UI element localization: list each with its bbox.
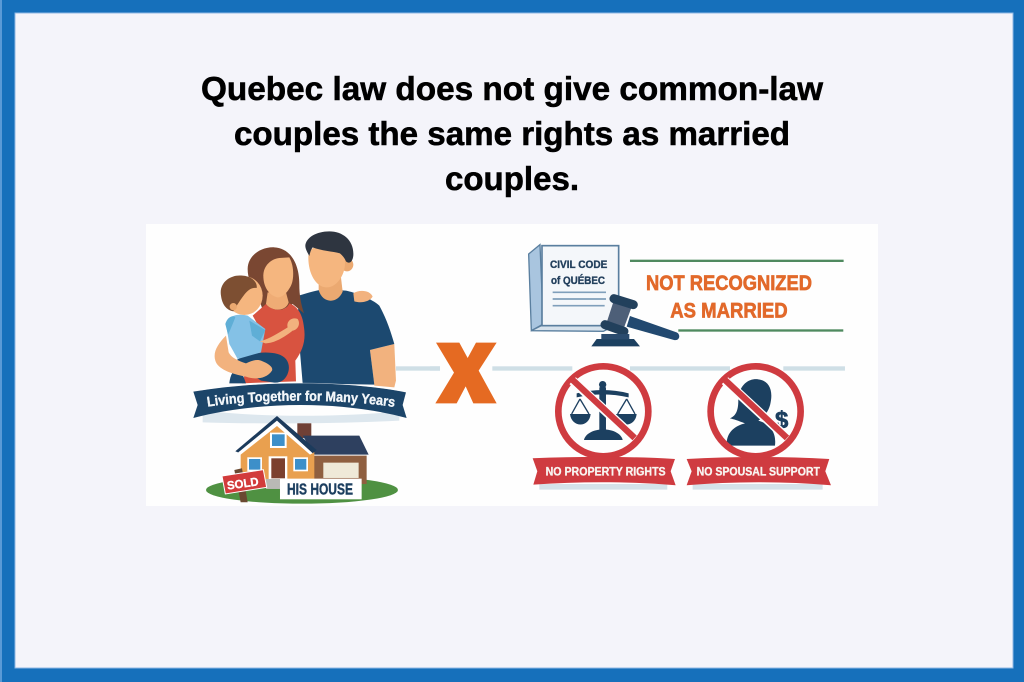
illustration panel: [146, 224, 878, 506]
woman's arm: [215, 336, 272, 378]
connector line left: [396, 366, 440, 371]
title: [201, 70, 823, 197]
chimney: [297, 423, 311, 438]
woman: [229, 247, 305, 383]
his house label: HIS HOUSE: [287, 481, 353, 498]
not recognized heading: [646, 272, 812, 323]
right illustration: [430, 245, 845, 490]
connector line right: [430, 366, 845, 371]
orange X: [435, 343, 497, 403]
house with SOLD sign: [206, 416, 398, 504]
green rules: [630, 260, 844, 332]
title: Quebec law does not give common-law: [201, 70, 823, 107]
garage wing: [313, 456, 367, 484]
his house label: [280, 479, 362, 499]
not recognized heading: AS MARRIED: [670, 300, 788, 323]
ribbon: no spousal support: NO SPOUSAL SUPPORT: [697, 466, 820, 479]
pants: [237, 353, 289, 383]
shirt: [226, 315, 265, 359]
left illustration: couple, banner and house: [193, 231, 440, 504]
ribbon: no property rights: [533, 457, 676, 490]
icon: no spousal support: $: [775, 407, 788, 434]
law book: CIVIL CODE: [550, 259, 607, 271]
sold sign: SOLD: [226, 475, 259, 493]
ribbon: no spousal support: [687, 457, 831, 490]
not recognized heading: NOT RECOGNIZED: [646, 272, 812, 295]
child: [215, 275, 299, 383]
title: couples.: [445, 160, 579, 197]
man: [298, 231, 396, 387]
child arm: [260, 318, 299, 343]
sold sign: [222, 468, 267, 502]
main house: [241, 421, 314, 481]
ribbon: no property rights: NO PROPERTY RIGHTS: [546, 466, 666, 479]
law book: of QUÉBEC: [551, 274, 605, 287]
lawn: [206, 476, 398, 504]
banner: Living Together for Many Years: Living Together for Many Years: [206, 390, 395, 407]
family figures: [215, 231, 396, 387]
gavel: [591, 299, 679, 346]
icon: no spousal support: [711, 366, 801, 456]
banner: Living Together for Many Years: [193, 344, 407, 445]
icon: no property rights scales: [558, 366, 648, 456]
law book: [529, 245, 619, 331]
head: [226, 276, 263, 315]
title: couples the same rights as married: [234, 115, 790, 152]
